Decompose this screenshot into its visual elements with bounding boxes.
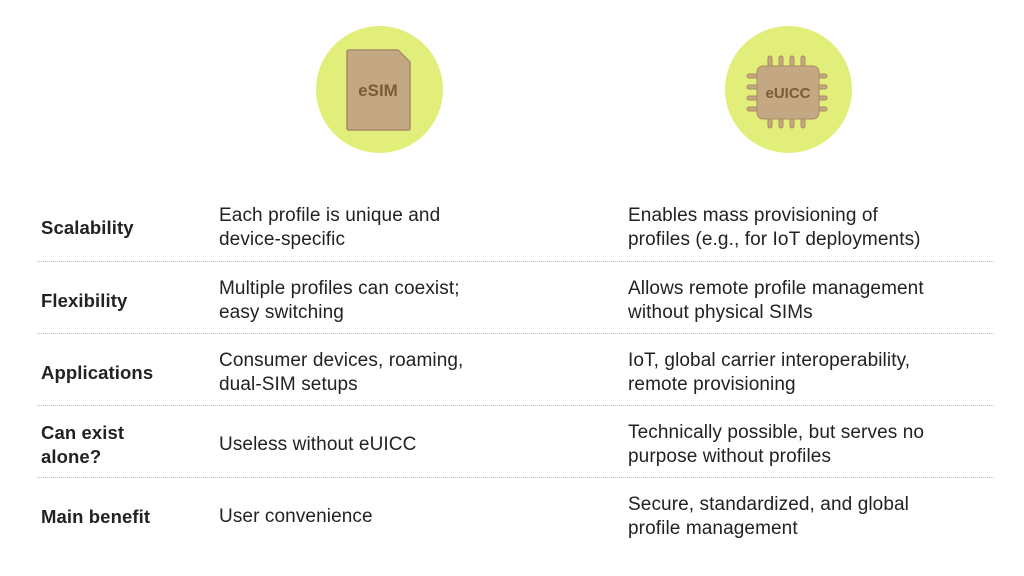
row: Can exist alone: Can exist xyxy=(41,422,124,443)
row: Applications: Applications xyxy=(41,362,153,383)
icon: eUICC chip xyxy=(725,26,852,153)
row: Applications: dual-SIM setups xyxy=(219,374,358,395)
row: Applications: Consumer devices, roaming, xyxy=(219,350,463,371)
icon: eSIM card xyxy=(316,26,443,153)
row: Scalability: device-specific xyxy=(219,229,345,250)
row: Main benefit: Secure, standardized, and global xyxy=(628,494,909,515)
row: Flexibility: Allows remote profile management xyxy=(628,278,924,299)
icon: eSIM card: eSIM xyxy=(358,81,398,100)
row: Scalability: profiles (e.g., for IoT deployments) xyxy=(628,229,921,250)
row: Main benefit xyxy=(41,494,909,539)
row: Flexibility: Multiple profiles can coexist; xyxy=(219,278,460,299)
row: Can exist alone: purpose without profiles xyxy=(628,446,831,467)
row: Scalability: Enables mass provisioning of xyxy=(628,205,878,226)
row: Applications xyxy=(41,350,910,395)
row: Can exist alone: alone? xyxy=(41,446,101,467)
row: Main benefit: Main benefit xyxy=(41,506,150,527)
row: Applications: IoT, global carrier interoperability, xyxy=(628,350,910,371)
row: Main benefit: profile management xyxy=(628,518,798,539)
icon: eUICC chip: eUICC xyxy=(765,85,811,102)
row: Flexibility: easy switching xyxy=(219,302,344,323)
row: Scalability: Each profile is unique and xyxy=(219,205,440,226)
row: Applications: remote provisioning xyxy=(628,374,796,395)
row: Flexibility: Flexibility xyxy=(41,290,127,311)
row: Can exist alone xyxy=(41,422,924,467)
row: Can exist alone: Technically possible, but serves no xyxy=(628,422,924,443)
row: Scalability xyxy=(41,205,921,250)
row: Can exist alone: Useless without eUICC xyxy=(219,434,416,455)
row: Scalability: Scalability xyxy=(41,217,134,238)
row: Main benefit: User convenience xyxy=(219,506,373,527)
row: Flexibility xyxy=(41,278,924,323)
row: Flexibility: without physical SIMs xyxy=(628,302,813,323)
